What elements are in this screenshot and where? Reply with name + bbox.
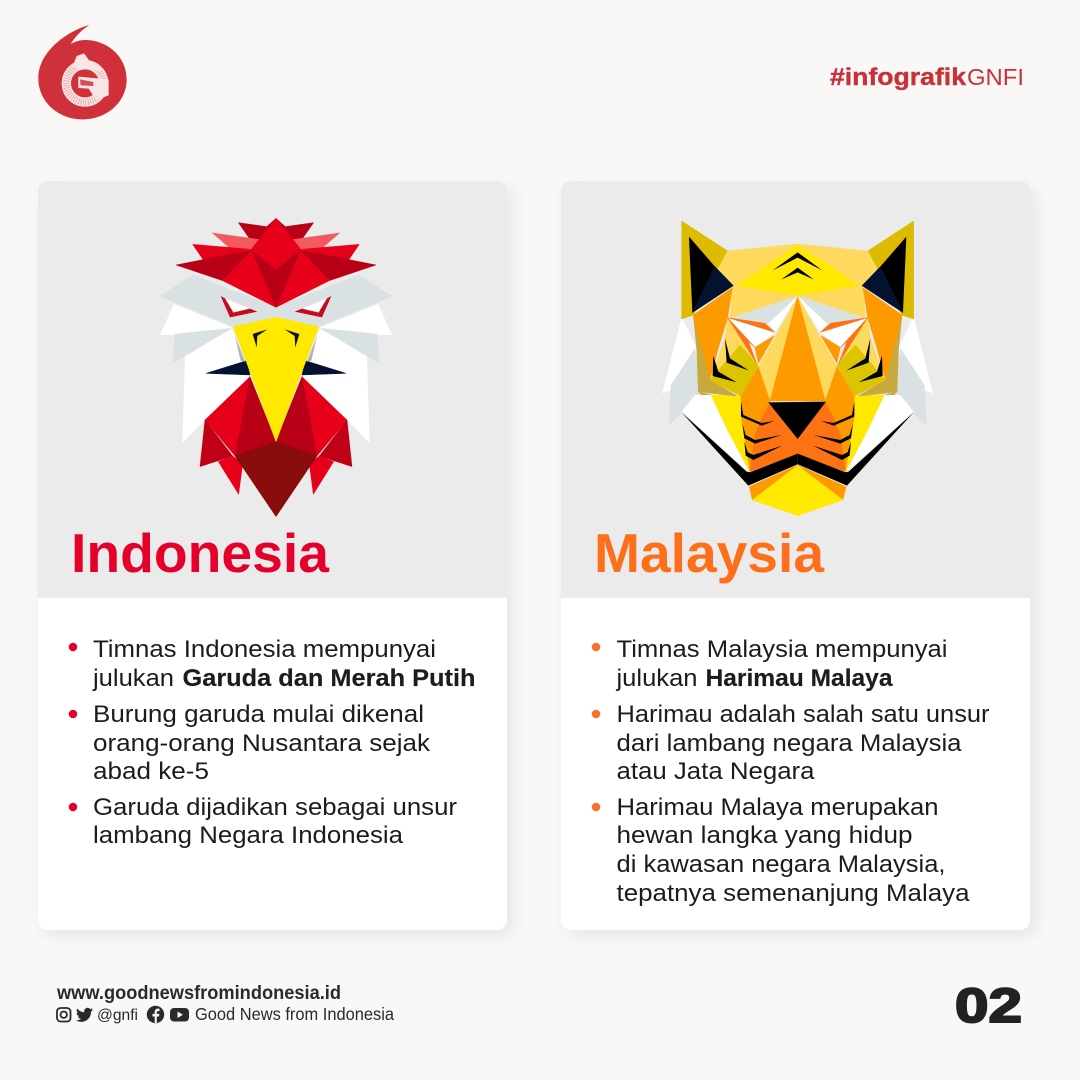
brand name: Good News from Indonesia — [195, 1004, 394, 1024]
logo: GNFI — [38, 25, 127, 119]
bullet list: Malaysia: julukan — [615, 665, 698, 692]
panel: Malaysia — [561, 181, 1036, 936]
bullet list: Indonesia: Garuda dan Merah Putih — [182, 665, 476, 692]
bullet list: Malaysia: Harimau Malaya merupakan — [616, 794, 938, 821]
bullet list: Malaysia — [592, 636, 990, 907]
footer: website and social handles — [56, 983, 394, 1024]
hashtag label — [830, 64, 1024, 91]
icon: tiger head — [662, 221, 933, 516]
bullet list: Indonesia: julukan — [92, 665, 174, 692]
bullet list: Indonesia: Timnas Indonesia mempunyai — [93, 636, 436, 663]
bullet list: Indonesia: Garuda dijadikan sebagai unsur — [93, 794, 457, 821]
bullet list: Malaysia: dari lambang negara Malaysia — [616, 730, 962, 757]
bullet list: Indonesia: orang-orang Nusantara sejak — [93, 730, 431, 757]
icon: twitter — [76, 1008, 93, 1022]
bullet list: Indonesia: abad ke-5 — [93, 758, 209, 785]
bullet list: Malaysia: Harimau Malaya — [706, 665, 893, 692]
bullet list: Malaysia: Harimau adalah salah satu unsur — [616, 701, 990, 728]
page number: 02 — [955, 980, 1022, 1033]
hashtag label: #infografik — [830, 64, 967, 91]
icon: youtube — [170, 1008, 189, 1022]
bullet list: Malaysia: Timnas Malaysia mempunyai — [616, 636, 948, 663]
bullet list: Malaysia: di kawasan negara Malaysia, — [616, 851, 946, 878]
panel: Indonesia — [38, 181, 513, 936]
icon: instagram — [57, 1008, 70, 1022]
bullet list: Malaysia: tepatnya semenanjung Malaya — [616, 880, 970, 907]
bullet list: Malaysia: hewan langka yang hidup — [616, 822, 912, 849]
icon: garuda head — [160, 218, 392, 517]
bullet list: Indonesia: Burung garuda mulai dikenal — [93, 701, 424, 728]
heading: Indonesia: Indonesia — [71, 522, 329, 584]
bullet list: Indonesia: lambang Negara Indonesia — [93, 822, 403, 849]
bullet list: Malaysia: atau Jata Negara — [616, 758, 815, 785]
heading: Malaysia: Malaysia — [594, 522, 824, 584]
bullet list: Indonesia — [69, 636, 475, 849]
website url: www.goodnewsfromindonesia.id — [56, 983, 341, 1004]
icon: facebook — [147, 1006, 164, 1023]
hashtag label: GNFI — [967, 64, 1024, 90]
handle: @gnfi — [97, 1007, 138, 1024]
